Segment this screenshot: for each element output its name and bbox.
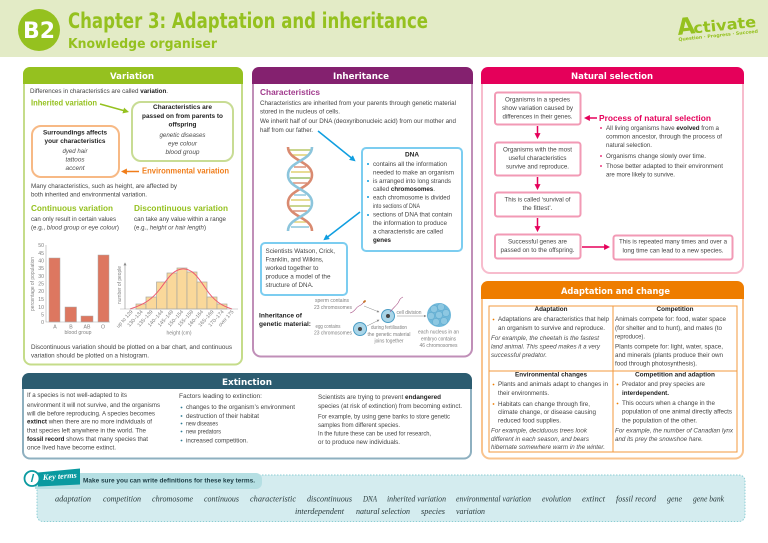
cell: environmental changes: their environments. xyxy=(498,390,549,397)
illustration: DNA helix xyxy=(288,147,312,231)
box: DNA: into sections of DNA xyxy=(373,203,421,210)
cell: competition and adaption: and its prey the snowshoe hare. xyxy=(615,436,703,443)
list: key terms: variation xyxy=(456,507,485,516)
list: key terms: competition xyxy=(103,494,141,504)
box: inherited characteristics xyxy=(132,102,233,161)
panel: extinction xyxy=(22,373,472,458)
diagram: fertilisation: 46 chromosomes xyxy=(420,343,458,349)
box: scientists: Scientists Watson, Crick, xyxy=(266,248,335,255)
box: most useful characteristics: useful characteristics xyxy=(508,155,566,162)
histogram: height: height (cm) xyxy=(166,330,192,336)
cell: environmental changes: Habitats can change through fire, xyxy=(498,401,590,408)
cell: adaptation: For example, the cheetah is the fastest xyxy=(491,335,599,342)
key terms tab xyxy=(24,468,262,489)
block: discontinuous variation xyxy=(134,204,228,232)
box: inherited characteristics: blood group xyxy=(166,149,200,156)
box: new species: This is repeated many times and over a xyxy=(619,238,727,246)
list: key terms: adaptation xyxy=(55,494,91,504)
box: DNA: is arranged into long strands xyxy=(373,178,451,185)
list: key terms: inherited variation xyxy=(387,494,446,504)
histogram: height: 135–139 xyxy=(137,309,155,328)
histogram: height: number of people xyxy=(117,266,123,304)
histogram: height: 165–169 xyxy=(198,309,216,328)
list: factors leading to extinction: new diseases xyxy=(186,420,218,428)
text: characteristics: We inherit half of our DNA (deoxyribonucleic acid) from our mother and xyxy=(260,118,456,125)
box: scientists: structure of DNA. xyxy=(266,282,314,289)
box: inherited characteristics: eye colour xyxy=(168,140,198,148)
list: key terms: interdependent xyxy=(295,507,345,516)
box: new species: long time can lead to a new species. xyxy=(622,248,724,254)
block: continuous variation: Continuous variation xyxy=(31,204,113,213)
list: factors leading to extinction xyxy=(179,393,295,444)
text: endangered species: Scientists are trying to prevent endangered xyxy=(318,394,441,401)
bar chart: blood group: 25 xyxy=(38,282,44,288)
box: scientists: Franklin, and Wilkins, xyxy=(266,256,324,264)
cell: competition and adaption: Competition and adaption xyxy=(635,372,715,378)
panel: key terms xyxy=(24,468,745,522)
subheading: characteristics: Characteristics xyxy=(260,88,321,97)
arrow: process pointer xyxy=(586,117,597,119)
box: survival of the fittest: the fittest’. xyxy=(522,205,553,212)
text: endangered species: or to produce new individuals. xyxy=(318,439,400,446)
list: key terms: discontinuous xyxy=(307,494,352,504)
cell: competition: reproduce). xyxy=(615,334,645,340)
cell: competition and adaption: the population of the other. xyxy=(622,418,697,424)
box: scientists: produce a model of the xyxy=(266,274,331,280)
logo: Activate: Question · Progress · Succeed xyxy=(678,29,758,43)
box: most useful characteristics: survive and reproduce. xyxy=(506,164,569,170)
box: DNA: called chromosomes. xyxy=(373,186,435,193)
box: inherited characteristics: genetic diseases xyxy=(160,132,206,139)
cell: adaptation xyxy=(491,306,609,359)
cell: competition and adaption: population of one animal directly affects xyxy=(622,408,732,416)
label: inheritance of genetic material xyxy=(259,312,311,328)
histogram: height: 140–144 xyxy=(147,309,165,328)
bar chart: blood group: 30 xyxy=(38,274,44,280)
bar chart: blood group: 5 xyxy=(41,312,44,318)
panel: variation xyxy=(23,67,243,364)
intro text: Differences in characteristics are called variation. xyxy=(30,88,168,95)
subtitle: Knowledge organiser xyxy=(68,36,217,52)
histogram: height: 155–159 xyxy=(177,309,195,328)
text: characteristics: stored in the nucleus of cells. xyxy=(260,108,340,116)
box: DNA: contains all the information xyxy=(373,161,447,168)
text: extinct species xyxy=(26,392,160,452)
cell: competition and adaption: This occurs when a change in the xyxy=(622,400,715,407)
list: factors leading to extinction: increased competition. xyxy=(186,438,248,444)
key terms tab: Make sure you can write definitions for these key terms. xyxy=(83,478,255,484)
logo: Activate xyxy=(676,7,758,43)
cell: environmental changes: reduced food supplies. xyxy=(498,418,561,424)
bar chart: blood group xyxy=(30,243,110,336)
heading: variation: Variation xyxy=(110,72,154,82)
text: characteristics: half from our father. xyxy=(260,127,313,134)
diagram: fertilisation: during fertilisation xyxy=(371,325,407,331)
text: extinct species: extinct when there are no more individuals of xyxy=(27,418,152,426)
box: most useful characteristics: Organisms with the most xyxy=(503,146,572,154)
box: inherited characteristics: offspring xyxy=(168,122,197,128)
arrow: step 3 to 4 xyxy=(536,218,538,230)
histogram: height: 170–174 xyxy=(208,309,226,328)
label: environmental variation: Environmental variation xyxy=(142,166,229,176)
chapter badge: B2 xyxy=(18,9,60,51)
heading: inheritance: Inheritance xyxy=(333,72,389,82)
arrow: step 2 to 3 xyxy=(536,177,538,188)
bar chart: blood group: O xyxy=(101,324,105,330)
box: DNA: needed to make an organism xyxy=(373,170,454,176)
block: continuous variation: (e.g., blood group or eye colour) xyxy=(31,224,119,232)
list: process points: are more likely to survive. xyxy=(606,172,675,178)
list: key terms: environmental variation xyxy=(456,494,531,504)
text: extinct species: If a species is not well-adapted to its xyxy=(27,392,127,399)
text: endangered species xyxy=(318,394,462,446)
arrow: inherited xyxy=(100,104,127,112)
histogram: height: up to 129 xyxy=(116,309,135,329)
box: organisms in a species: show variation caused by xyxy=(502,105,574,112)
label: inheritance of genetic material: genetic material: xyxy=(259,321,311,328)
list: key terms: extinct xyxy=(582,494,606,504)
box: DNA xyxy=(362,148,462,251)
text: plotting note xyxy=(31,344,232,360)
bar chart: blood group: AB xyxy=(84,324,91,330)
box: organisms in a species xyxy=(495,92,580,124)
box: DNA: a characteristic are called xyxy=(373,228,443,236)
text: endangered species: samples from different species. xyxy=(318,422,400,429)
box: DNA: genes xyxy=(373,237,391,244)
cell: environmental changes: climate change, or disease causing xyxy=(498,409,596,416)
box: DNA: each chromosome is divided xyxy=(373,194,450,202)
cell: adaptation: successful predator. xyxy=(491,352,547,359)
text: extinct species: environment it will not survive, and the organisms xyxy=(27,402,160,409)
title: Chapter 3: Adaptation and inheritance xyxy=(68,9,428,33)
diagram: fertilisation: each nucleus in an xyxy=(418,330,459,336)
cell: competition xyxy=(615,306,726,368)
arrow: environmental xyxy=(123,170,139,172)
cell: environmental changes: For example, deciduous trees look xyxy=(491,428,588,434)
diagram: fertilisation: 23 chromosomes xyxy=(314,330,352,336)
box: DNA: the information to produce xyxy=(373,220,447,227)
cell: competition: Plants compete for: light, water, space, xyxy=(615,344,723,350)
box: inherited characteristics: passed on from parents to xyxy=(142,113,223,120)
cell: competition: (for shelter and to hunt), and mates (to xyxy=(615,325,722,332)
bar chart: blood group: A xyxy=(53,324,57,330)
bar chart: blood group: 20 xyxy=(38,289,44,295)
panel: adaptation and change xyxy=(481,281,744,458)
label: inheritance of genetic material: Inheritance of xyxy=(259,312,303,320)
arrow: to DNA box xyxy=(318,131,354,160)
chapter badge: B2: B2 xyxy=(23,19,55,44)
diagram: fertilisation: egg contains xyxy=(316,324,341,330)
arrow: step 1 to 2 xyxy=(536,126,538,137)
list: key terms: characteristic xyxy=(250,494,296,504)
list: process points xyxy=(600,125,723,178)
histogram: height: over 175 xyxy=(218,309,236,328)
list: process points: Organisms change slowly over time. xyxy=(606,153,706,160)
list: process points: All living organisms have evolved from a xyxy=(606,125,719,132)
cell: adaptation: land animal. This speed makes it a very xyxy=(491,344,601,350)
list: process points: Those better adapted to their environment xyxy=(606,163,723,170)
box: DNA: sections of DNA that contain xyxy=(373,212,452,218)
cell: environmental changes xyxy=(491,372,608,451)
logo: Activate: ctivate xyxy=(692,13,757,37)
box: successful genes: Successful genes are xyxy=(508,238,567,246)
list: factors leading to extinction: Factors leading to extinction: xyxy=(179,393,262,400)
list: key terms: DNA xyxy=(362,494,377,504)
diagram: fertilisation: sperm contains xyxy=(315,298,349,304)
text: extinct species: that species left anywhere in the world. The xyxy=(27,428,146,434)
cell: environmental changes: Environmental changes xyxy=(515,372,587,378)
box: inherited characteristics: Characteristics are xyxy=(153,104,212,111)
list: factors leading to extinction: changes to the organism’s environment xyxy=(186,404,295,411)
box: scientists: worked together to xyxy=(264,265,319,272)
cell: competition: Competition xyxy=(656,306,694,313)
diagram: fertilisation: cell division xyxy=(396,310,422,316)
box: environmental characteristics: dyed hair xyxy=(62,148,88,155)
list: key terms xyxy=(55,494,724,516)
list: key terms: chromosome xyxy=(152,494,193,504)
text: plotting note: Discontinuous variation should be plotted on a bar chart, and continuous xyxy=(31,344,232,351)
text: many characteristics: Many characteristics, such as height, are affected by xyxy=(31,183,178,190)
cell: competition: Animals compete for: food, water space xyxy=(615,316,726,323)
box: organisms in a species: Organisms in a species xyxy=(505,96,570,104)
block: continuous variation: can only result in certain values xyxy=(31,216,116,223)
text: characteristics: Characteristics are inherited from your parents through genetic material xyxy=(260,100,456,107)
histogram: height: 130–134 xyxy=(127,309,145,328)
panel: natural selection xyxy=(481,67,744,273)
diagram: fertilisation: embryo contains xyxy=(421,336,456,342)
header band xyxy=(0,0,768,57)
list: key terms: fossil record xyxy=(616,494,657,504)
list: factors leading to extinction: destruction of their habitat xyxy=(186,413,259,420)
cell: environmental changes: hibernate somewhere warm in the winter. xyxy=(491,444,605,451)
text: extinct species: once lived have become extinct. xyxy=(27,444,116,452)
panel: inheritance xyxy=(252,67,473,356)
box: environmental characteristics xyxy=(32,126,119,177)
heading: natural selection: Natural selection xyxy=(571,72,653,82)
cell: adaptation: an organism to survive and reproduce. xyxy=(498,325,605,332)
arrow: to scientists box xyxy=(325,212,360,239)
cell: competition and adaption: For example, the number of Canadian lynx xyxy=(615,428,734,434)
histogram: height xyxy=(116,263,238,336)
list: key terms: gene bank xyxy=(693,494,724,504)
bar chart: blood group: 0 xyxy=(41,320,44,326)
cell: competition and adaption xyxy=(615,372,734,443)
list: key terms: evolution xyxy=(542,494,571,504)
histogram: height: 160–164 xyxy=(187,309,205,328)
cell: competition and adaption: interdependent. xyxy=(622,390,669,397)
list: key terms: gene xyxy=(667,494,682,504)
bar chart: blood group: 45 xyxy=(38,251,44,257)
diagram: fertilisation: joins together xyxy=(374,338,404,344)
text: extinct species: fossil record shows that many species that xyxy=(27,436,148,443)
arrow: to new species xyxy=(582,246,608,248)
histogram: height: 145–149 xyxy=(157,309,175,328)
box: environmental characteristics: your characteristics xyxy=(44,138,106,145)
box: organisms in a species: differences in their genes. xyxy=(502,114,573,120)
box: scientists xyxy=(261,243,347,295)
text: plotting note: variation should be plotted on a histogram. xyxy=(31,352,149,360)
box: successful genes xyxy=(495,234,580,258)
cell: competition: and minerals (plants produce their own xyxy=(615,352,723,359)
box: environmental characteristics: tattoos xyxy=(66,156,85,164)
block: discontinuous variation: (e.g., height or hair length) xyxy=(134,224,206,232)
cell: competition and adaption: Predator and prey species are xyxy=(622,381,705,388)
box: environmental characteristics: Surroundings affects xyxy=(43,130,107,136)
logo: Activate: A xyxy=(676,13,696,41)
list: key terms: natural selection xyxy=(356,507,410,516)
bar chart: blood group: blood group xyxy=(64,330,92,336)
bar chart: blood group: B xyxy=(69,324,73,330)
box: survival of the fittest: This is called ‘survival of xyxy=(504,196,571,204)
bar chart: blood group: percentage of population xyxy=(30,257,36,311)
bar chart: blood group: 15 xyxy=(38,297,44,303)
cell: adaptation: Adaptations are characteristics that help xyxy=(498,316,609,323)
key terms tab: Key terms xyxy=(41,471,77,482)
list: key terms: continuous xyxy=(204,494,239,504)
block: continuous variation xyxy=(31,204,119,232)
block: discontinuous variation: can take any value within a range xyxy=(134,216,226,223)
box: environmental characteristics: accent xyxy=(66,165,85,172)
cell: adaptation: Adaptation xyxy=(534,306,568,313)
box: survival of the fittest xyxy=(495,192,580,216)
text: many characteristics: both inherited and environmental variation. xyxy=(31,192,147,198)
text: endangered species: species (at risk of extinction) from becoming extinct. xyxy=(318,403,462,410)
list: process points: common ancestor, through the process of xyxy=(606,134,722,140)
cell: environmental changes: Plants and animals adapt to changes in xyxy=(498,381,608,388)
heading: adaptation and change: Adaptation and change xyxy=(561,287,670,297)
cell: competition: food through photosynthesis). xyxy=(615,360,697,368)
text: endangered species: For example, by using gene banks to store genetic xyxy=(318,414,451,420)
subheading: process of natural selection: Process of natural selection xyxy=(599,113,711,123)
bar chart: blood group: 35 xyxy=(38,266,44,272)
list: process points: natural selection. xyxy=(606,142,652,149)
bar chart: blood group: 50 xyxy=(38,243,44,249)
text: many characteristics xyxy=(31,183,178,198)
text: endangered species: In the future these can be used for research, xyxy=(318,430,431,438)
box: DNA: DNA xyxy=(405,152,419,158)
histogram: height: 150–154 xyxy=(167,309,185,328)
cell: environmental changes: different in each season, and bears xyxy=(491,436,590,443)
table grid xyxy=(489,306,737,452)
diagram: fertilisation: 23 chromosomes xyxy=(314,305,352,311)
bar chart: blood group: 10 xyxy=(38,305,44,311)
heading: extinction: Extinction xyxy=(222,378,272,388)
text: extinct species: will die before reproducing. A species becomes xyxy=(26,410,155,418)
diagram: fertilisation: the genetic material xyxy=(368,332,410,338)
diagram: fertilisation xyxy=(314,297,459,349)
label: inherited variation: Inherited variation xyxy=(31,98,97,108)
box: most useful characteristics xyxy=(495,142,580,176)
box: successful genes: passed on to the offspring. xyxy=(500,247,575,254)
list: key terms: species xyxy=(421,507,445,516)
list: factors leading to extinction: new predators xyxy=(186,428,221,436)
bar chart: blood group: 40 xyxy=(38,258,44,264)
box: new species xyxy=(614,236,732,260)
block: discontinuous variation: Discontinuous variation xyxy=(134,204,228,213)
text: characteristics xyxy=(260,100,456,134)
